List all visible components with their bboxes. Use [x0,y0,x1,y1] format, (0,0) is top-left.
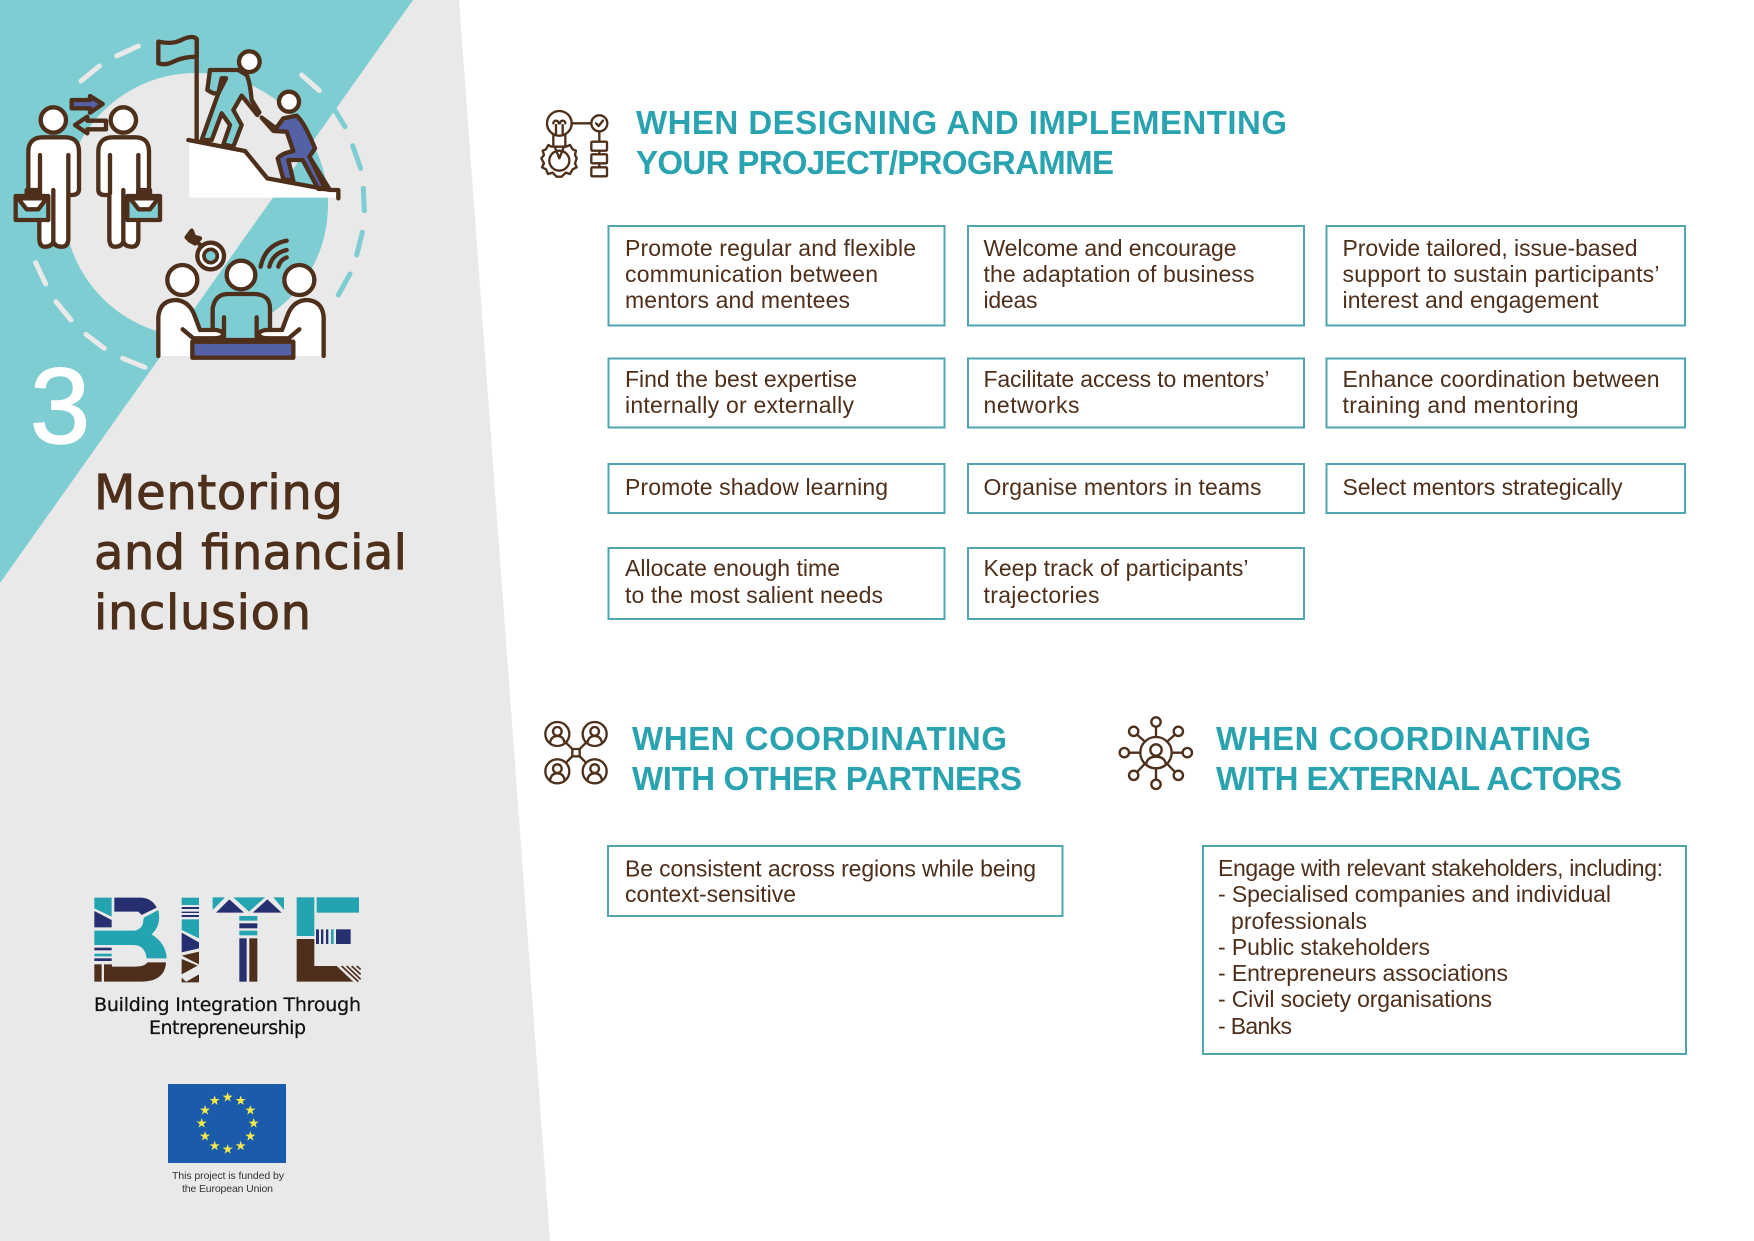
heading: other partners [632,720,1022,797]
EU funding note: This project is funded by [172,1170,285,1182]
icon: bulb, gear and flowchart [541,111,607,177]
panel: box select mentors: Select mentors strategically [1342,474,1623,500]
icon: external actors network [1120,717,1192,789]
heading: designing and implementing: YOUR PROJECT/PROGRAMME [636,144,1114,181]
heading: other partners: WITH OTHER PARTNERS [632,760,1022,797]
dashed ring [36,46,364,367]
panel: box coordination: training and mentoring [1342,392,1578,418]
panel: box allocate time: Allocate enough time [625,555,840,581]
EU funding note [172,1170,285,1195]
icon: climbers reaching flag [158,37,338,198]
panel: box external stakeholders: - Public stakeholders [1218,934,1430,960]
logo tagline: Building Integration Through [94,994,361,1016]
panel: box allocate time: to the most salient needs [625,582,883,608]
panel: box promote communication: communication between [625,261,878,287]
panel: left sidebar background [0,0,550,1241]
panel: box external stakeholders: - Entrepreneurs associations [1218,960,1508,986]
icon: meeting team with target [158,231,324,358]
panel: box tailored support [1326,226,1685,326]
panel: box coordination [1326,358,1685,428]
title [94,465,407,641]
EU flag [168,1084,286,1163]
panel: box shadow learning: Promote shadow learning [625,474,888,500]
panel: box external stakeholders: Engage with relevant stakeholders, including: [1218,855,1663,881]
panel: box business ideas: the adaptation of business [984,261,1254,287]
panel: box external stakeholders: - Banks [1218,1013,1292,1039]
section number: 3 [30,345,90,466]
panel: box expertise: Find the best expertise [625,366,857,392]
heading: external actors: WHEN COORDINATING [1216,720,1591,757]
panel: box business ideas: Welcome and encourage [984,235,1236,261]
panel: box trajectories: Keep track of participants’ [984,555,1248,581]
icon: partner network [545,722,607,783]
panel: box external stakeholders [1203,846,1686,1054]
panel: box partners [608,846,1062,916]
panel: box tailored support: interest and engagement [1342,287,1599,313]
logo: BITE [94,897,361,982]
panel: box expertise [608,358,944,428]
title: Mentoring [94,465,343,521]
title: and financial [94,525,407,581]
heading: external actors: WITH EXTERNAL ACTORS [1216,760,1622,797]
panel: box trajectories [968,548,1304,619]
panel: box tailored support: support to sustain participants’ [1342,261,1660,287]
EU funding note: the European Union [182,1183,273,1195]
panel: box tailored support: Provide tailored, issue-based [1342,235,1638,261]
icon: two businessmen exchanging [16,96,160,247]
panel: box shadow learning [608,464,944,513]
panel: box coordination: Enhance coordination between [1342,366,1660,392]
heading: designing and implementing [636,104,1287,181]
panel: box trajectories: trajectories [984,582,1100,608]
panel: box promote communication: Promote regular and flexible [625,235,916,261]
panel: box expertise: internally or externally [625,392,854,418]
panel: box partners: context-sensitive [625,881,796,907]
heading: designing and implementing: WHEN DESIGNING AND IMPLEMENTING [636,104,1287,141]
heading: external actors [1216,720,1622,797]
panel: box promote communication: mentors and mentees [625,287,850,313]
panel: box networks: Facilitate access to mentors’ [984,366,1270,392]
panel: box partners: Be consistent across regions while being [625,856,1036,882]
panel: box external stakeholders: - Specialised companies and individual [1218,881,1611,907]
title: inclusion [94,585,311,641]
panel: box promote communication [608,226,944,326]
logo tagline [94,994,361,1039]
panel: box business ideas: ideas [984,287,1038,313]
panel: box mentor teams [968,464,1304,513]
panel: box business ideas [968,226,1304,326]
panel: box select mentors [1326,464,1685,513]
heading: other partners: WHEN COORDINATING [632,720,1007,757]
panel: box external stakeholders: - Civil society organisations [1218,986,1492,1012]
panel: box mentor teams: Organise mentors in teams [984,474,1262,500]
panel: box networks [968,358,1304,428]
logo tagline: Entrepreneurship [149,1017,306,1039]
panel: box networks: networks [984,392,1080,418]
panel: box external stakeholders: professionals [1231,908,1367,934]
panel: box allocate time [608,548,944,619]
